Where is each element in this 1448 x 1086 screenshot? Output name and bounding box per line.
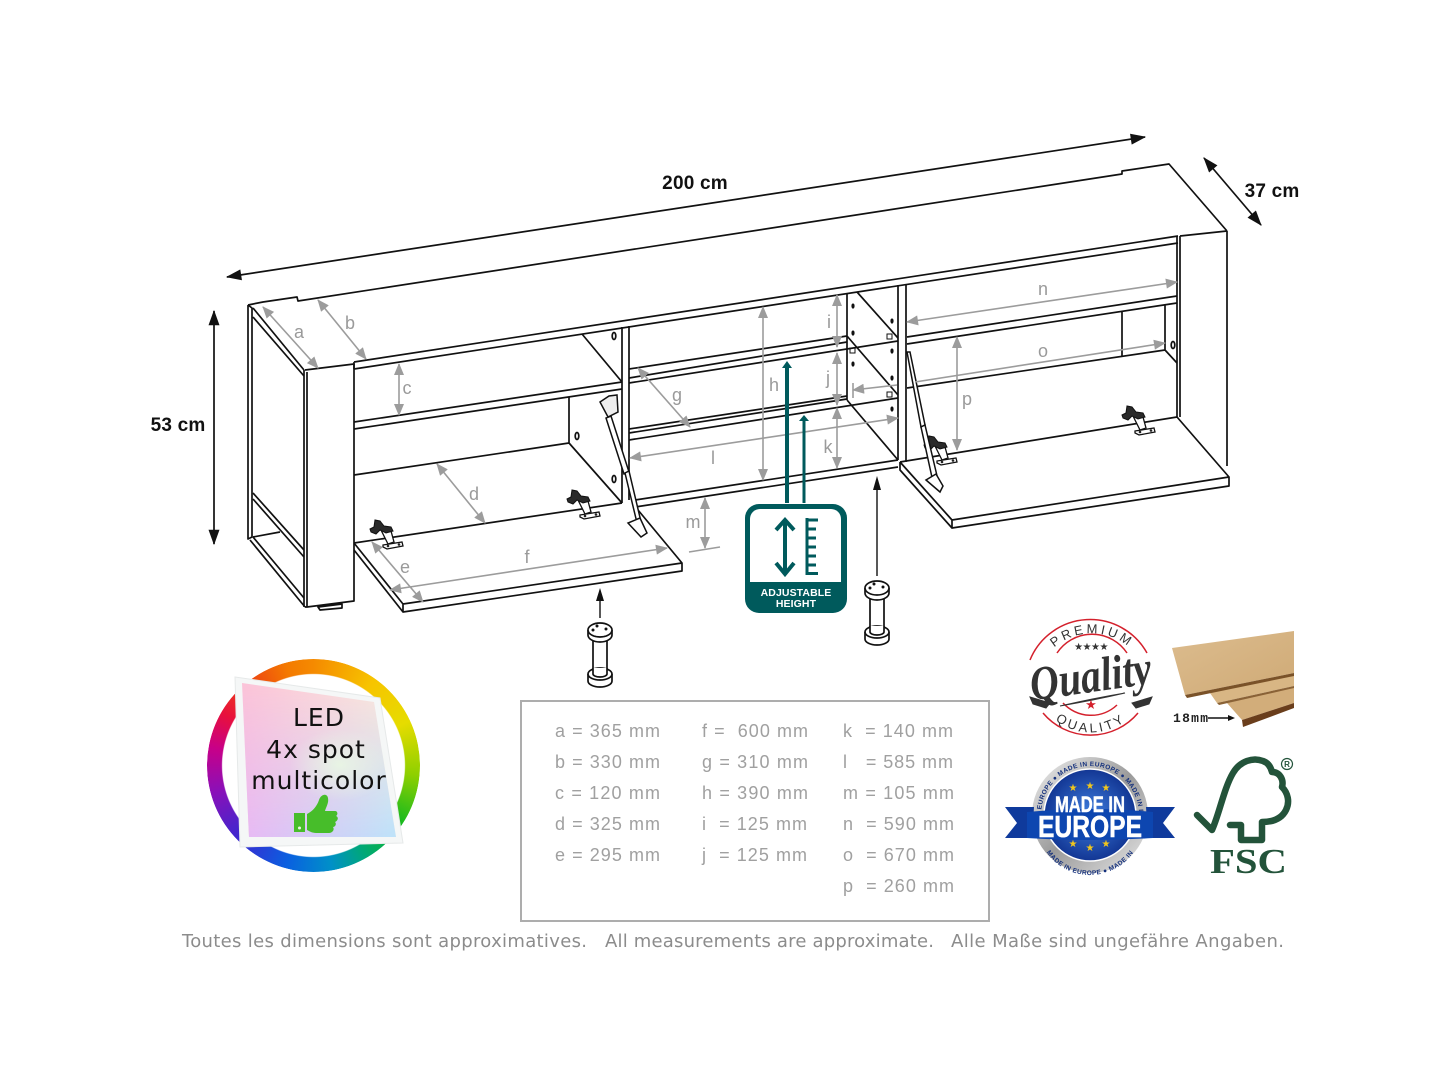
icon: LED colour ring [207,659,420,872]
dimension letters: h [769,375,779,395]
column 1: d = 325 mm [555,814,660,834]
dimension letters: c [402,378,412,398]
footer note: Alle Maße sind ungefähre Angaben. [951,931,1284,952]
dimension letters [294,279,1048,577]
LED panel [235,677,403,847]
LED text: multicolor [251,766,387,795]
dimension letters: k [824,437,834,457]
arrow: depth [1204,158,1261,225]
badge: made in Europe: MADE IN [1055,792,1125,817]
badge: made in Europe: IN EUROPE ● MADE IN EUROPE ● MADE IN EU [1036,762,1144,812]
badge: premium quality: PREMIUM [1050,624,1132,647]
icon: adjustable height badge [745,361,847,613]
footer note: Toutes les dimensions sont approximatives. [181,931,587,952]
logo: FSC [1197,758,1292,881]
column 3: o = 670 mm [843,845,954,865]
label: 37 cm: 37 cm [1245,181,1299,202]
column 3: p = 260 mm [843,876,954,896]
badge: made in Europe [1005,757,1175,876]
badge: made in Europe: ★ [1086,843,1095,854]
column 3: m = 105 mm [843,783,954,803]
dimension letters: e [400,557,410,577]
left flap door [354,503,682,612]
MDF boards 18mm: 18mm [1173,711,1208,726]
badge: made in Europe: MADE IN EUROPE ● MADE IN [1046,850,1133,876]
arrow: overall width [227,137,1145,277]
grey dimension arrows [263,282,1177,602]
gas struts [600,352,943,537]
column 3: l = 585 mm [843,752,953,772]
badge: premium quality: ★★★★ [1074,642,1108,653]
column 3 [843,721,954,896]
dimension letters: b [345,313,355,333]
dimension letters: i [827,312,831,332]
hinges [370,406,1155,549]
icon: adjustable height badge: ADJUSTABLE [761,587,831,599]
leg and arrow: right [865,476,889,645]
furniture line drawing [248,164,1229,612]
label: 200 cm: 200 cm [662,173,728,194]
centre compartment and glass shelves [629,284,906,507]
LED text: 4x spot [266,735,366,764]
arrow: height [213,311,215,544]
shelf support holes [850,303,894,412]
leg and arrow: left [588,588,612,687]
badge: premium quality: ★ [1085,698,1097,713]
footer note: All measurements are approximate. [605,931,934,952]
badge: premium quality: QUALITY [1057,714,1121,732]
dimension letters: p [962,389,972,409]
right compartment and shelf [907,231,1227,466]
badge: premium quality [1026,618,1155,736]
label: 53 cm: 53 cm [151,415,205,436]
dimension letters: d [469,484,479,504]
column 2: i = 125 mm [702,814,807,834]
left side panel [248,305,354,610]
top board and outer carcass [248,164,1227,369]
logo: FSC: FSC [1210,842,1287,881]
logo: FSC: R [1284,760,1290,769]
dimension letters: o [1038,341,1048,361]
icon: adjustable height badge: HEIGHT [776,598,817,610]
badge: made in Europe: EUROPE [1038,809,1142,844]
right flap door [900,417,1229,528]
badge: premium quality: Quality [1026,642,1155,711]
column 2 [701,721,808,865]
column 1: c = 120 mm [555,783,660,803]
column 1: e = 295 mm [555,845,660,865]
badge: made in Europe: ★ [1102,839,1111,850]
dimension letters: a [294,322,305,342]
icon: thumbs up [294,795,338,833]
column 3: n = 590 mm [843,814,954,834]
dimension letters: m [686,512,700,532]
dimension letters: l [711,448,715,468]
dimension letters: n [1038,279,1048,299]
LED text [251,703,387,795]
dimension letters: j [825,368,830,388]
dimension letters: f [524,547,530,567]
MDF boards 18mm [1172,631,1294,727]
column 2: f = 600 mm [702,721,808,741]
dimension letters: g [672,385,682,405]
badge: made in Europe: ★ [1102,783,1111,794]
column 1: b = 330 mm [555,752,660,772]
column 2: g = 310 mm [702,752,808,772]
column 3: k = 140 mm [843,721,953,741]
column 1 [555,721,660,865]
badge: made in Europe: ★ [1086,781,1095,792]
LED text: LED [293,703,345,732]
footer note [181,931,1284,952]
column 2: h = 390 mm [702,783,808,803]
left compartment and shelf [354,326,629,503]
badge: made in Europe: ★ [1069,783,1078,794]
badge: made in Europe: ★ [1069,839,1078,850]
dimensions table [521,701,989,921]
column 1: a = 365 mm [555,721,660,741]
column 2: j = 125 mm [701,845,807,865]
